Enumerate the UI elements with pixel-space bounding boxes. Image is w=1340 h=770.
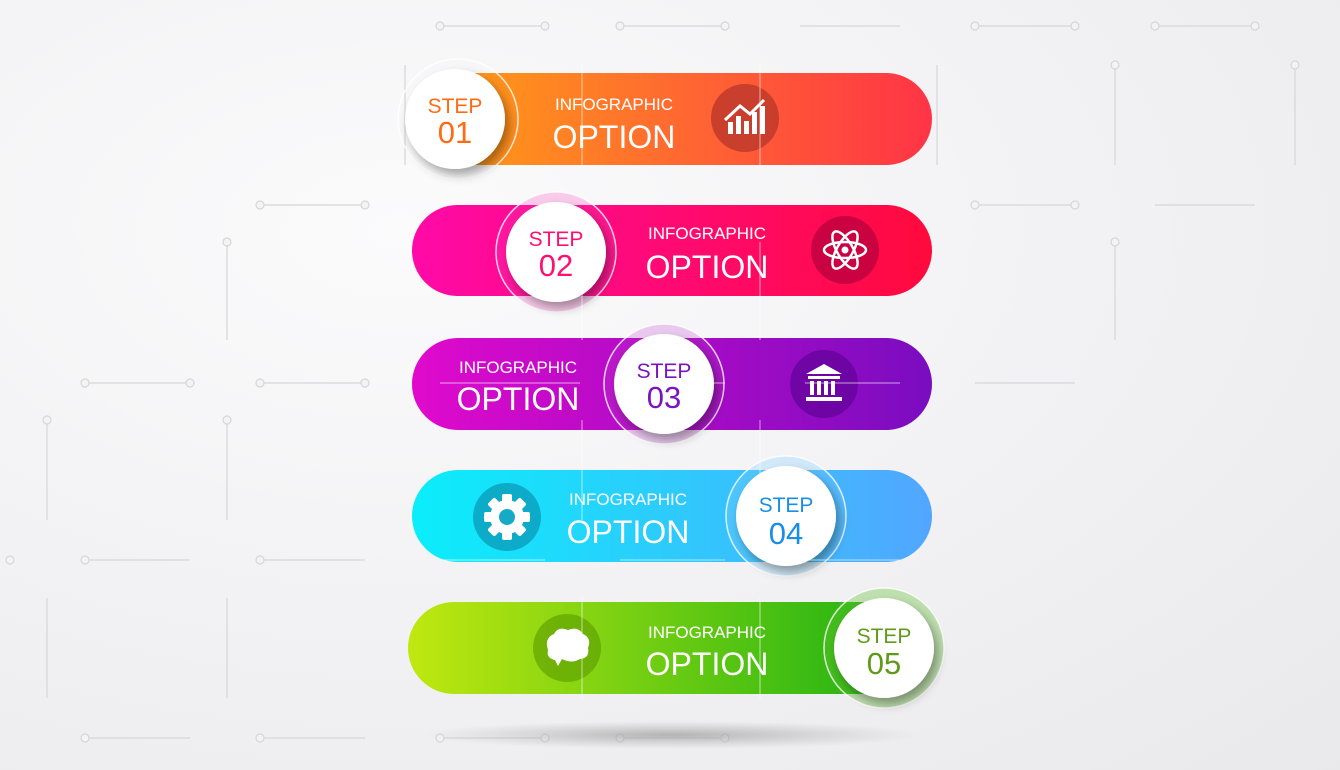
step 4 circle: STEP <box>759 494 813 517</box>
step 4 circle: 04 <box>769 516 803 551</box>
text: step 1 option: INFOGRAPHIC <box>555 95 673 114</box>
step 3 circle: STEP <box>637 360 691 383</box>
text: step 2 option: INFOGRAPHIC <box>648 224 766 243</box>
text: step 4 option: INFOGRAPHIC <box>569 490 687 509</box>
step 5 circle: STEP <box>857 625 911 648</box>
step 5 circle <box>824 588 944 708</box>
text: step 5 option: OPTION <box>646 646 768 682</box>
step 3 bar <box>412 324 932 444</box>
step 3 circle: 03 <box>647 380 681 415</box>
text: step 4 option: OPTION <box>567 514 689 550</box>
step 2 circle: STEP <box>529 228 583 251</box>
step 3 circle <box>604 324 724 444</box>
text: step 2 option <box>646 224 768 285</box>
text: step 4 option <box>567 490 689 550</box>
text: step 2 option: OPTION <box>646 249 768 285</box>
text: step 5 option: INFOGRAPHIC <box>648 623 766 642</box>
step 1 circle <box>398 59 518 179</box>
step 1 circle: STEP <box>428 95 482 118</box>
icon: growth chart <box>711 84 779 152</box>
step 5 bar <box>408 588 944 708</box>
text: step 5 option <box>646 623 768 682</box>
text: step 3 option <box>457 358 579 417</box>
text: step 1 option: OPTION <box>553 119 675 155</box>
text: step 3 option: INFOGRAPHIC <box>459 358 577 377</box>
step 1 bar <box>398 59 932 179</box>
text: step 3 option: OPTION <box>457 381 579 417</box>
text: step 1 option <box>553 95 675 155</box>
step 1 circle: 01 <box>438 115 472 150</box>
icon: atom <box>811 216 879 284</box>
step 2 circle: 02 <box>539 248 573 283</box>
step 2 circle <box>496 192 616 312</box>
step 4 bar <box>412 456 932 576</box>
floor shadow <box>422 721 922 749</box>
step 4 circle <box>726 456 846 576</box>
step 2 bar <box>412 192 932 312</box>
icon: bank building <box>790 350 858 418</box>
icon: brain <box>533 614 601 682</box>
icon: gear <box>473 483 541 551</box>
step 5 circle: 05 <box>867 646 901 681</box>
